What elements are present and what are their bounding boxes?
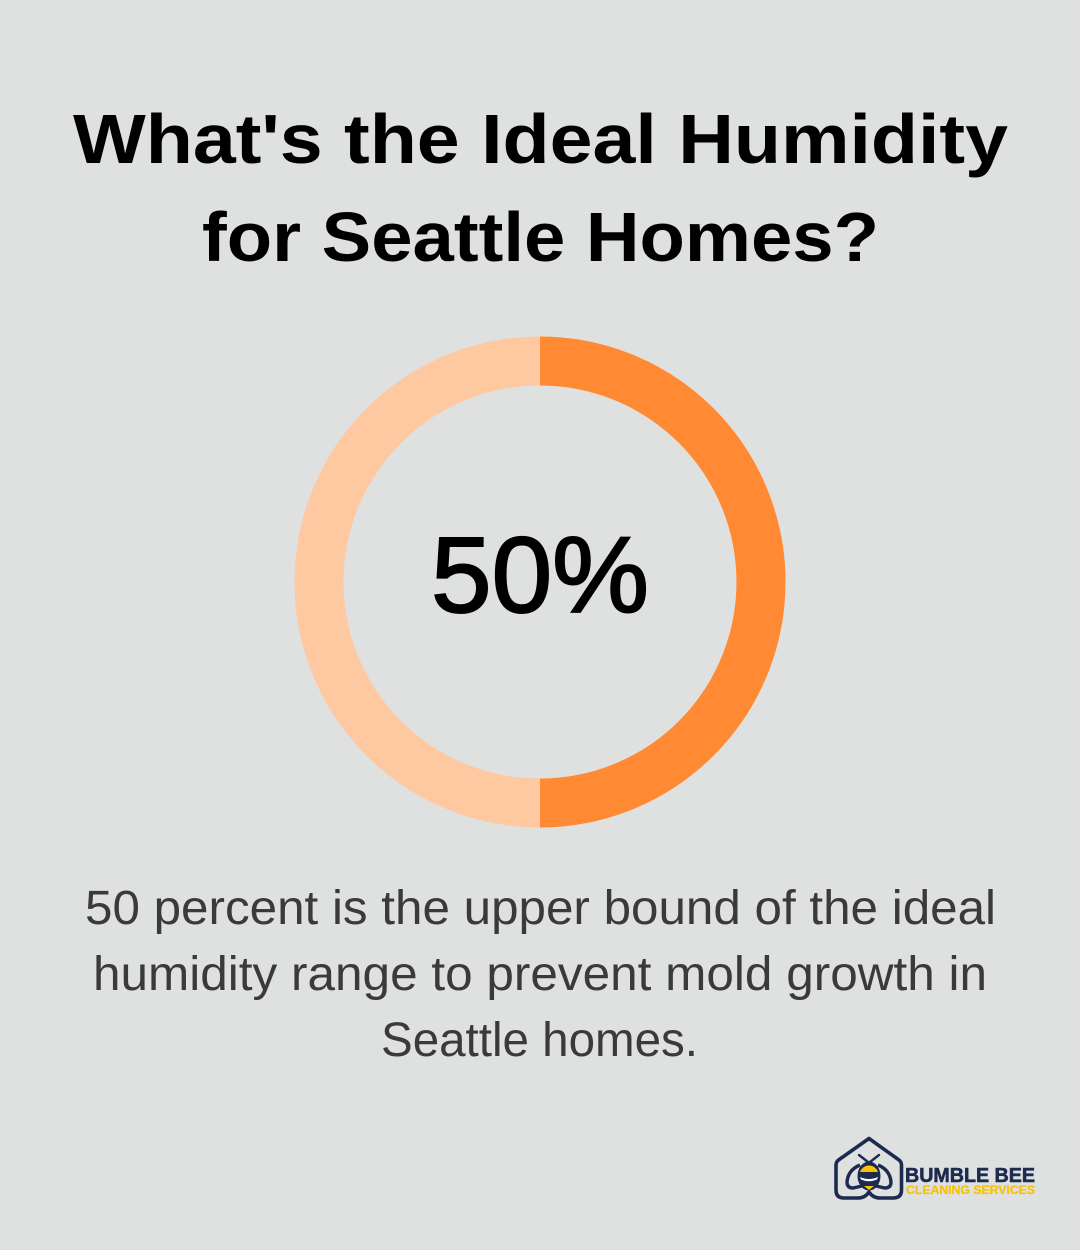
logo: Bumble Bee Cleaning Services <box>836 1138 1035 1198</box>
icon: bee <box>847 1155 891 1190</box>
title: What's the Ideal Humidity <box>73 100 1008 178</box>
description text: Seattle homes. <box>381 1014 698 1067</box>
description text <box>85 882 996 1067</box>
donut chart: 50% <box>319 361 761 803</box>
logo wordmark: BUMBLE BEE <box>905 1164 1035 1187</box>
logo tagline: CLEANING SERVICES <box>906 1183 1035 1197</box>
title: for Seattle Homes? <box>202 198 879 276</box>
title <box>73 100 1008 276</box>
description text: humidity range to prevent mold growth in <box>93 948 987 1001</box>
donut value: 50% <box>431 514 649 635</box>
description text: 50 percent is the upper bound of the ideal <box>85 882 996 935</box>
icon: house outline <box>836 1138 902 1198</box>
